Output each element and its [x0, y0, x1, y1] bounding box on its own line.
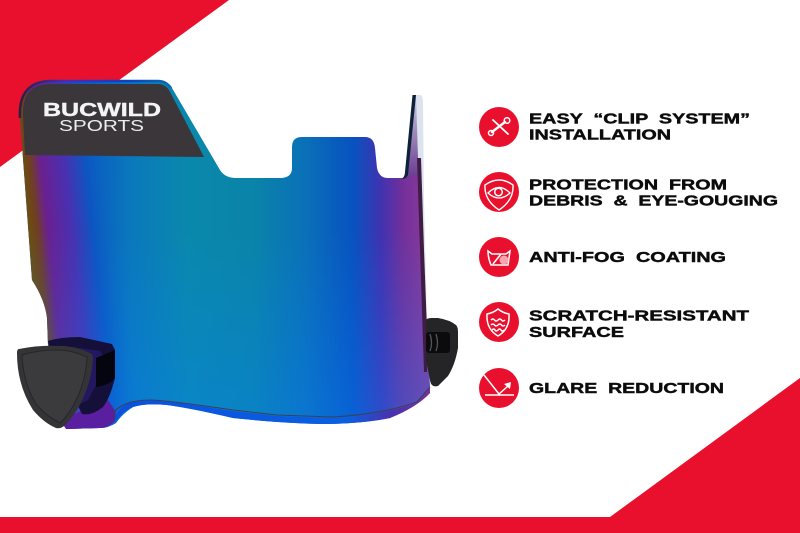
icon: reflected ray [479, 368, 519, 408]
right clip: body [426, 318, 458, 386]
feature 1: clip system [479, 107, 750, 147]
right clip: slot [426, 332, 450, 353]
visor: dark logo band [23, 84, 204, 157]
icon: crossed tools [479, 107, 519, 147]
left clip: shield inset [22, 350, 87, 423]
visor: left colour shift [20, 80, 430, 429]
icon: fogged lens [479, 237, 519, 277]
feature 2: protection [479, 172, 778, 212]
left clip: inner face [72, 347, 103, 405]
right clip [426, 318, 458, 386]
icon: shield with waves [479, 302, 519, 342]
right clip: slot ridges [430, 334, 438, 351]
text: protection from debris and eye-gouging [529, 176, 778, 210]
feature 4: scratch-resistant [479, 302, 749, 342]
visor: top rim [20, 81, 171, 118]
text: easy clip system installation: EASY “CLIP SYSTEM” [529, 110, 750, 128]
visor: right edge pale strip [415, 95, 431, 388]
text: protection from debris and eye-gouging: PROTECTION FROM [529, 176, 727, 194]
visor: lens [20, 80, 430, 429]
visor: right dark edge line [417, 158, 427, 372]
visor [17, 80, 458, 429]
visor: fin inner face [406, 95, 418, 178]
logo word: BUCWILD: BUCWILD [43, 99, 161, 120]
feature 3: anti-fog [479, 237, 726, 277]
text: easy clip system installation [529, 110, 750, 144]
visor: purple corner under left clip [60, 400, 116, 429]
icon: eye in shield [479, 172, 519, 212]
visor: lower brightening [20, 80, 430, 429]
logo word: SPORTS: SPORTS [59, 118, 144, 135]
text: glare reduction: GLARE REDUCTION [529, 380, 724, 397]
red triangle: top left [0, 0, 229, 167]
text: anti-fog coating: ANTI-FOG COATING [529, 249, 726, 266]
red shape: bottom right corner and footer bar [0, 378, 800, 533]
text: easy clip system installation: INSTALLATION [529, 126, 671, 144]
visor: fin edge [402, 95, 416, 179]
text: scratch-resistant surface: SURFACE [529, 324, 624, 341]
left clip: shield [17, 346, 93, 428]
visor: bottom lip band [115, 388, 430, 424]
text: protection from debris and eye-gouging: DEBRIS & EYE-GOUGING [529, 192, 778, 210]
left clip: slot [96, 350, 115, 387]
logo: Bucwild Sports [43, 99, 161, 135]
left clip: rear block [48, 337, 115, 414]
feature 5: glare reduction [479, 368, 724, 408]
visor: lip line [114, 387, 430, 420]
text: scratch-resistant surface: SCRATCH-RESISTANT [529, 308, 749, 324]
text: scratch-resistant surface [529, 308, 749, 341]
